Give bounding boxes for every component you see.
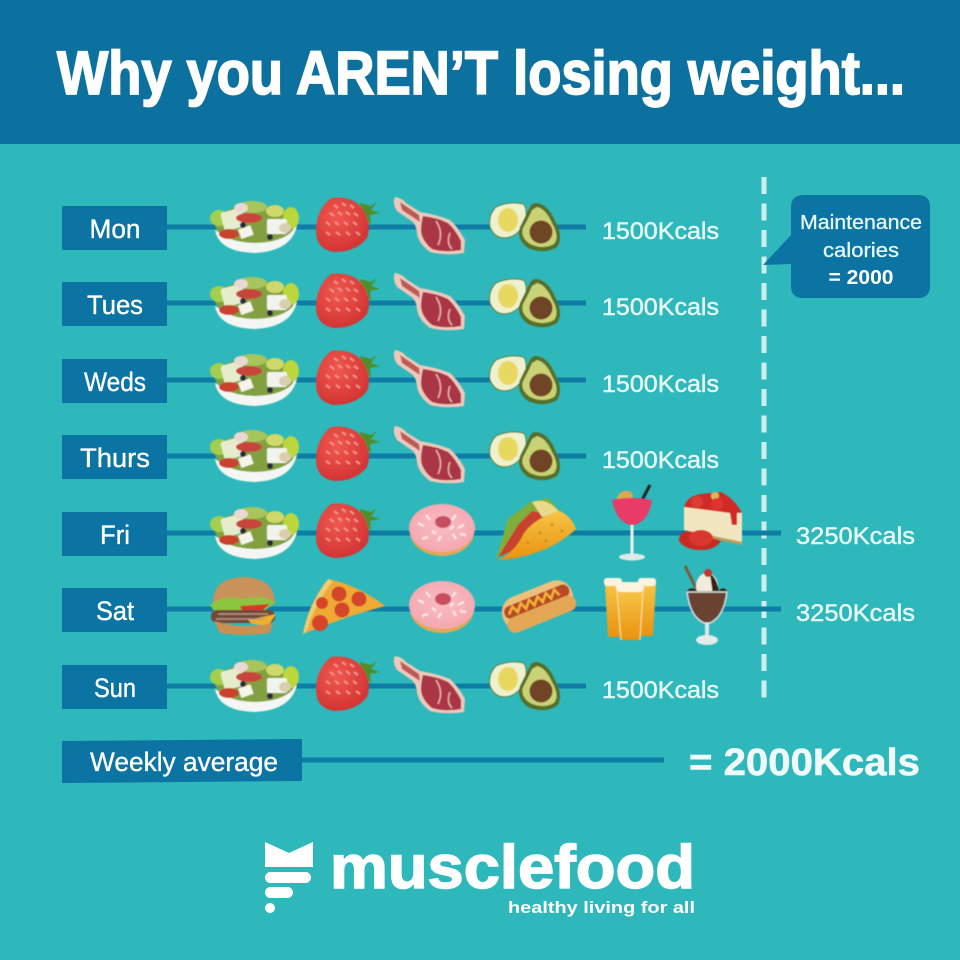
calories: 1500Kcals <box>602 447 719 474</box>
row: Tues <box>62 273 719 330</box>
weekly average label <box>62 739 302 783</box>
day label: Mon <box>90 214 140 244</box>
calories: 3250Kcals <box>796 523 915 550</box>
wordmark: musclefood <box>330 833 695 901</box>
callout: maintenance calories: Maintenance <box>800 212 922 234</box>
logo <box>265 833 695 917</box>
day label: Fri <box>100 520 130 550</box>
weekly average label: Weekly average <box>90 747 278 777</box>
weekly total: = 2000Kcals <box>689 742 920 784</box>
foods <box>210 566 728 645</box>
calories: 3250Kcals <box>796 600 915 627</box>
foods <box>210 656 560 713</box>
day label: Tues <box>87 290 143 320</box>
foods <box>210 426 560 483</box>
row: Weds <box>62 350 719 407</box>
callout: maintenance calories: = 2000 <box>828 267 894 289</box>
day label <box>62 665 167 709</box>
row: Fri <box>62 485 915 560</box>
calories: 1500Kcals <box>602 677 719 704</box>
day label <box>62 435 167 479</box>
calories: 1500Kcals <box>602 294 719 321</box>
foods <box>210 197 560 254</box>
day label <box>62 206 167 250</box>
weekly average row <box>62 739 920 784</box>
day label: Sun <box>94 673 136 703</box>
day label <box>62 359 167 403</box>
header band <box>0 0 960 144</box>
row: Mon <box>62 197 719 254</box>
tagline: healthy living for all <box>508 898 695 917</box>
row: Sat <box>62 566 915 645</box>
logo icon <box>265 842 313 913</box>
day label: Weds <box>84 367 146 397</box>
day label <box>62 512 167 556</box>
callout: maintenance calories: calories <box>823 240 899 262</box>
row: Thurs <box>62 426 719 483</box>
row: Sun <box>62 656 719 713</box>
foods <box>210 273 560 330</box>
day label: Thurs <box>80 443 150 473</box>
day label: Sat <box>96 596 134 626</box>
calories: 1500Kcals <box>602 371 719 398</box>
maintenance dashed line <box>762 177 766 702</box>
calories: 1500Kcals <box>602 218 719 245</box>
day label <box>62 282 167 326</box>
foods <box>210 485 742 560</box>
callout: maintenance calories <box>763 195 930 298</box>
day label <box>62 588 167 632</box>
foods <box>210 350 560 407</box>
